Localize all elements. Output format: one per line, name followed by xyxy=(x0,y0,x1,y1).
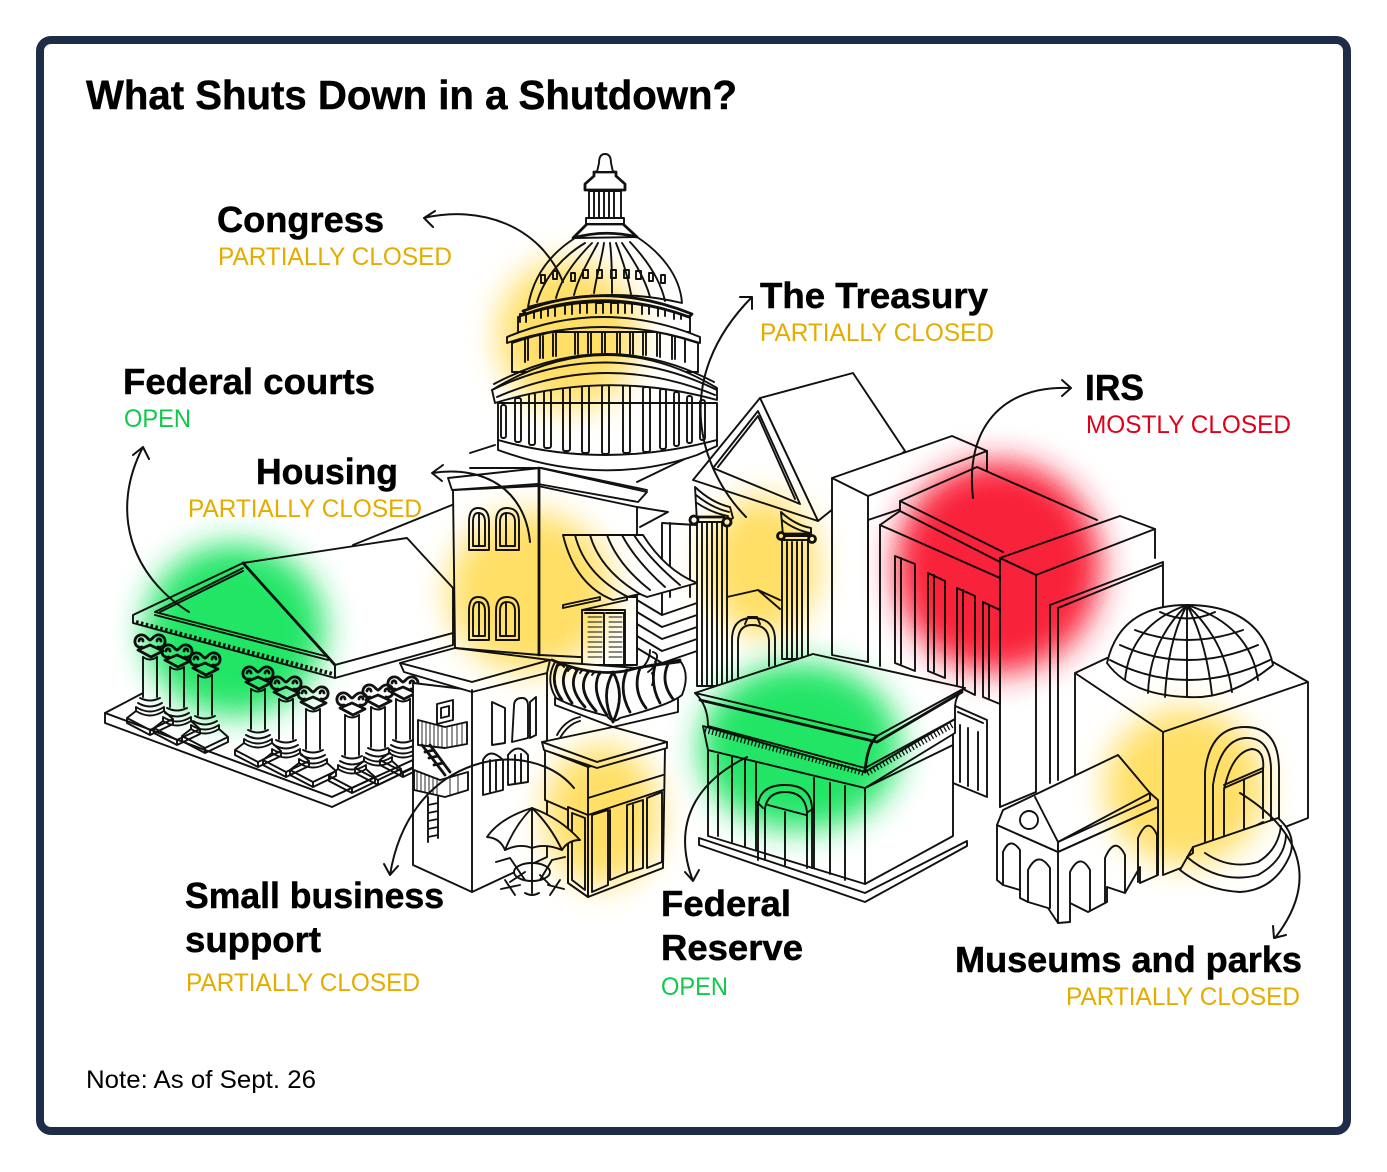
label: IRS: IRS xyxy=(1085,367,1144,408)
label: The Treasury: The Treasury xyxy=(760,275,988,316)
building: IRS xyxy=(880,467,1164,807)
highlight: IRS xyxy=(895,461,1101,673)
label: Housing xyxy=(188,451,422,523)
arrow: Congress xyxy=(424,211,563,282)
label: Congress: Congress xyxy=(217,199,384,240)
label: Small business support xyxy=(185,875,444,997)
building: The Treasury xyxy=(690,373,905,690)
highlight: Museums xyxy=(1105,709,1265,865)
building: museum annex xyxy=(997,755,1158,923)
label: Small business support: PARTIALLY CLOSED xyxy=(186,969,420,997)
highlight: Federal courts xyxy=(145,544,325,716)
callout arrows xyxy=(127,211,1300,938)
highlight: Small business xyxy=(544,745,660,885)
label: Federal Reserve: Reserve xyxy=(661,927,803,968)
building: Federal courts xyxy=(105,505,453,807)
icon: cafe umbrella and table xyxy=(487,808,580,895)
highlight: Housing xyxy=(448,512,612,672)
status colour highlights xyxy=(145,260,1265,885)
label: Congress: PARTIALLY CLOSED xyxy=(218,243,452,271)
label: IRS xyxy=(1085,367,1291,439)
arrow: The Treasury xyxy=(701,297,752,517)
building: Housing xyxy=(448,468,697,738)
label: The Treasury: PARTIALLY CLOSED xyxy=(760,319,994,347)
arrow: Museums and parks xyxy=(1240,793,1300,938)
label: Federal courts: OPEN xyxy=(124,405,191,433)
label: Small business support: Small business xyxy=(185,875,444,916)
label: Federal courts xyxy=(123,361,375,433)
label: Congress xyxy=(217,199,452,271)
label: Housing: PARTIALLY CLOSED xyxy=(188,495,422,523)
label: Museums and parks xyxy=(955,939,1302,1011)
building: shop xyxy=(542,727,667,897)
arrow: Small business xyxy=(384,760,574,875)
label: The Treasury xyxy=(760,275,994,347)
highlight: Federal Reserve xyxy=(700,663,900,831)
arrow: Federal courts xyxy=(127,447,189,612)
highlight: Congress xyxy=(498,260,638,410)
building: domed museum xyxy=(1075,605,1308,892)
arrow: Housing xyxy=(432,465,530,542)
label: Small business support: support xyxy=(185,919,321,960)
arrow: Federal Reserve xyxy=(685,757,747,881)
label: Museums and parks: PARTIALLY CLOSED xyxy=(1066,983,1300,1011)
illustration: government buildings xyxy=(105,154,1308,923)
note: Note: As of Sept. 26 xyxy=(86,1066,316,1094)
label: Federal courts: Federal courts xyxy=(123,361,375,402)
label: Federal Reserve: Federal xyxy=(661,883,791,924)
label: Museums and parks: Museums and parks xyxy=(955,939,1302,980)
building: Congress dome xyxy=(470,154,717,490)
label: Federal Reserve xyxy=(661,883,803,1001)
label: IRS: MOSTLY CLOSED xyxy=(1086,411,1291,439)
label: Federal Reserve: OPEN xyxy=(661,973,728,1001)
building: small apartment xyxy=(400,648,550,892)
building: tall block behind the IRS xyxy=(832,436,987,662)
title: What Shuts Down in a Shutdown? xyxy=(86,72,737,118)
highlight: Treasury xyxy=(706,496,818,636)
arrow: IRS xyxy=(972,380,1071,498)
label: Housing: Housing xyxy=(256,451,398,492)
building: Federal Reserve xyxy=(695,654,967,902)
